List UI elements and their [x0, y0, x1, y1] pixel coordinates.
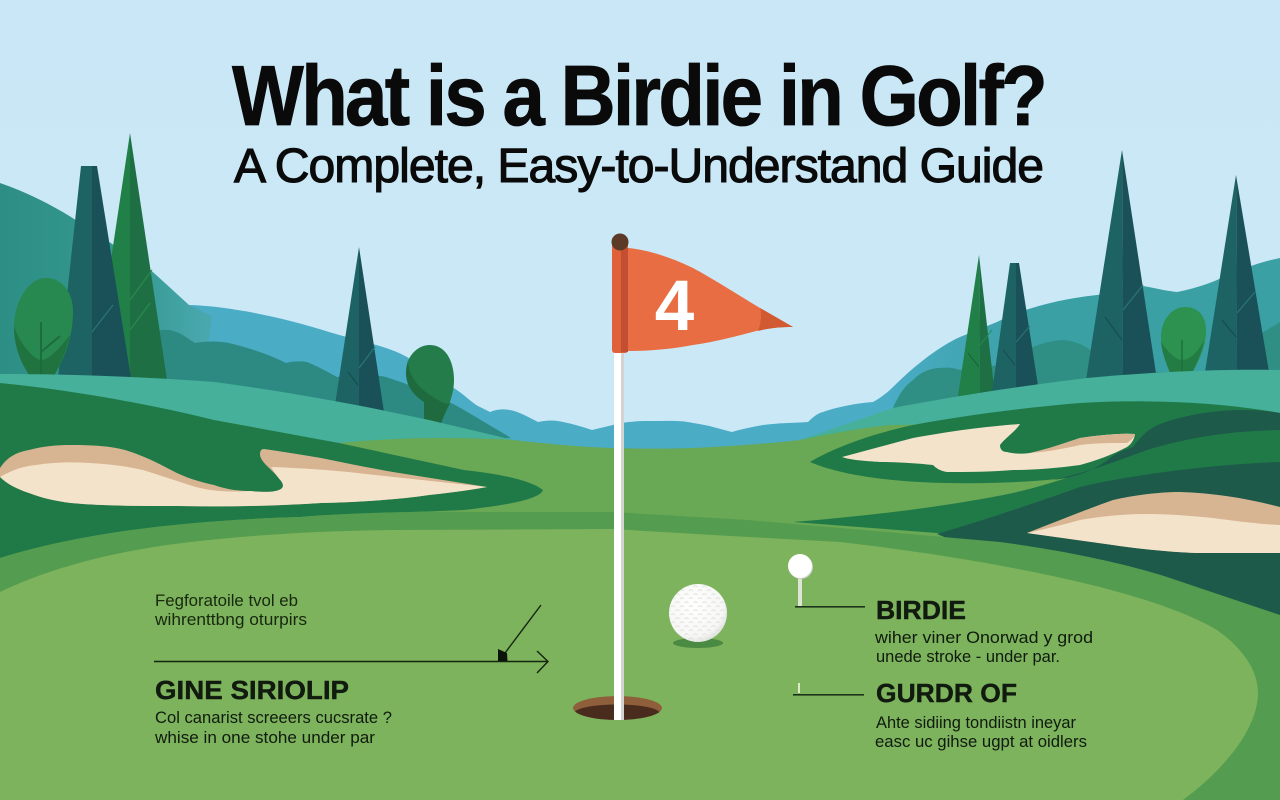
tree: round right — [1161, 307, 1206, 373]
trees: left group — [14, 133, 454, 424]
fairway base — [0, 420, 1280, 800]
tree: green conifer right — [958, 255, 995, 396]
title: What is a Birdie in Golf? — [232, 49, 1045, 144]
tree: round left — [14, 278, 73, 376]
callout: birdie: BIRDIE — [876, 595, 966, 625]
icon: flag with number 4 — [612, 234, 793, 353]
putting green — [0, 529, 1258, 800]
tree: tall teal conifer right — [1086, 150, 1157, 380]
teal slopes — [0, 370, 1280, 452]
callout: gurdr of: GURDR OF — [876, 678, 1017, 708]
distant hills — [0, 183, 1280, 470]
callout: gine siriolip — [154, 675, 392, 747]
bunker: left — [0, 445, 487, 506]
arrow: horizontal with pointer — [154, 605, 548, 673]
callout: gine siriolip: Col canarist screeers cucsrate ? — [155, 709, 392, 727]
bunker: right upper — [842, 424, 1135, 472]
icon: golf ball — [669, 584, 727, 648]
tree: teal conifer far right — [1205, 175, 1269, 372]
callout: gurdr of — [875, 678, 1087, 751]
trees: right group — [958, 150, 1269, 396]
flag number: 4 — [655, 267, 695, 346]
icon: hole — [573, 696, 662, 722]
callout: upper left note: Fegforatoile tvol eb — [155, 592, 298, 610]
callout: upper left note: wihrenttbng oturpirs — [154, 611, 307, 629]
callout: birdie: wiher viner Onorwad y grod — [874, 628, 1093, 647]
left rough mound — [0, 383, 543, 558]
tree: small teal conifer — [335, 247, 384, 412]
tree: tall green conifer — [100, 133, 167, 380]
icon: ball on tee — [788, 554, 865, 608]
icon: small tee marker — [793, 683, 864, 696]
tree: teal conifer right — [992, 263, 1039, 392]
callout: upper left note — [154, 592, 307, 629]
bunker: right lower — [1027, 492, 1280, 553]
callout: birdie — [874, 595, 1093, 666]
callout: gurdr of: Ahte sidiing tondiistn ineyar — [876, 713, 1076, 732]
callout: gine siriolip: whise in one stohe under par — [154, 729, 376, 747]
tree: dark teal conifer — [58, 166, 131, 378]
green collar band — [0, 512, 1280, 800]
right rough mounds — [793, 401, 1280, 640]
icon: flag pole — [614, 350, 624, 720]
callout: birdie: unede stroke - under par. — [876, 647, 1060, 666]
callout: gurdr of: easc uc gihse ugpt at oidlers — [875, 732, 1087, 751]
callout: gine siriolip: GINE SIRIOLIP — [155, 675, 349, 705]
tree: round centre-left — [406, 345, 454, 424]
subtitle: A Complete, Easy-to-Understand Guide — [234, 140, 1043, 193]
